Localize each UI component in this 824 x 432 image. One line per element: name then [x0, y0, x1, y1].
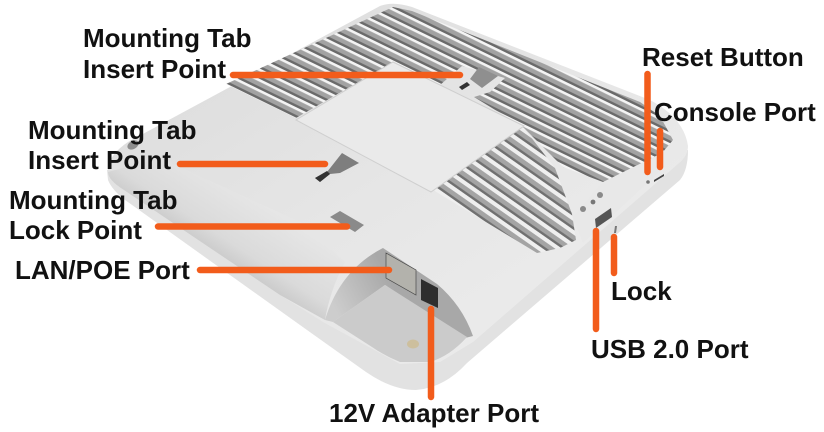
center label panel: [296, 62, 524, 192]
LAN port: [386, 253, 416, 295]
device body: [107, 4, 688, 390]
label: 12V adapter port: 12V Adapter Port: [329, 398, 539, 428]
label: lock: Lock: [611, 276, 672, 306]
lock slit: [614, 226, 617, 233]
callout line: LAN port: [200, 267, 389, 273]
label: mounting tab lock point: Mounting Tab: [9, 185, 177, 215]
mounting hole: [126, 139, 140, 151]
alcove floor: [333, 285, 467, 362]
status LEDs: [580, 206, 586, 212]
port alcove: [325, 248, 473, 362]
label: middle mounting tab insert point: Insert Point: [28, 145, 171, 175]
top surface: [108, 4, 688, 364]
console slot: [654, 174, 664, 182]
callout line: USB: [593, 231, 599, 329]
callout line: lock point: [158, 223, 347, 230]
label: reset button: Reset Button: [642, 42, 804, 72]
screw: [407, 340, 419, 348]
callout line: upper insert point: [233, 72, 460, 78]
lower cooling fins: [433, 127, 576, 253]
callout line: 12V adapter: [428, 309, 434, 397]
reset hole: [646, 180, 650, 184]
callout line: console: [657, 131, 663, 167]
upper cooling fins: [226, 7, 673, 182]
label: LAN/POE port: LAN/POE Port: [15, 255, 190, 285]
left lobe shading: [108, 158, 345, 320]
label: upper mounting tab insert point: Insert Point: [83, 54, 226, 84]
middle mounting tab slot: [315, 153, 359, 182]
label: USB 2.0 port: USB 2.0 Port: [591, 334, 749, 364]
callout line: lock: [611, 237, 617, 273]
USB port: [595, 208, 612, 228]
port module: [573, 153, 664, 243]
callout line: reset: [644, 74, 651, 172]
label: mounting tab lock point: Lock Point: [9, 215, 142, 245]
adapter port: [421, 279, 438, 308]
base shell: [107, 150, 688, 390]
label: upper mounting tab insert point: Mounting Tab: [83, 23, 251, 53]
callout line: middle insert point: [180, 161, 325, 167]
label: console port: Console Port: [654, 97, 816, 127]
upper mounting tab slot: [459, 67, 498, 90]
lock point slot: [330, 211, 364, 232]
label: middle mounting tab insert point: Mounting Tab: [28, 115, 196, 145]
